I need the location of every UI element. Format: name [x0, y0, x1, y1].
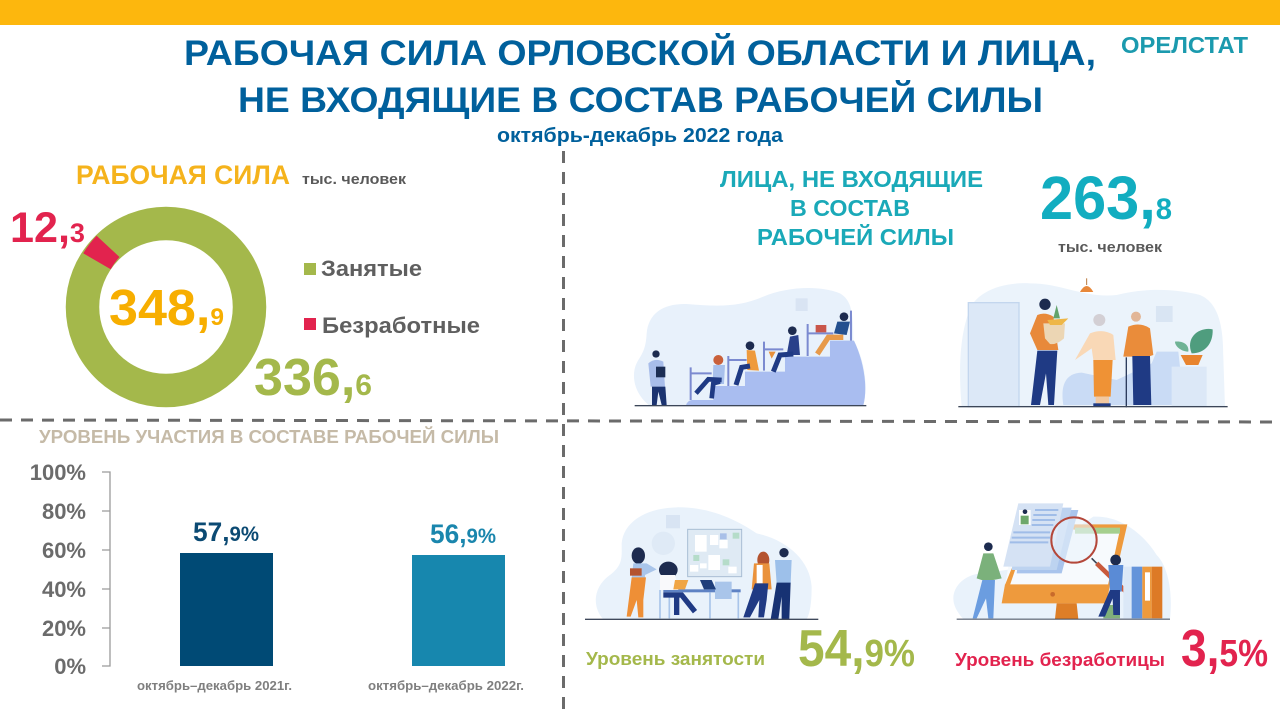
y axis: 60% [42, 538, 86, 563]
panel: employment rate [585, 507, 915, 678]
label: employment rate: Уровень занятости [586, 649, 765, 669]
panel: outside the labour force [634, 164, 1228, 407]
label: unemployment rate: Уровень безработицы [955, 650, 1165, 670]
title [184, 33, 1096, 120]
heading: labour force: РАБОЧАЯ СИЛА [76, 160, 290, 190]
illustration: students on stairs [634, 288, 866, 406]
unit label: тыс. человек [302, 171, 407, 188]
y axis: 80% [42, 499, 86, 524]
value: unemployed: 12,3 [10, 204, 85, 252]
value: employment rate: 54,9% [798, 620, 915, 678]
bar: 2022: 56,9% [430, 519, 496, 549]
organisation name: ОРЕЛСТАТ [1121, 32, 1248, 58]
legend: unemployed: Безработные [322, 313, 480, 338]
panel: labour force [10, 160, 480, 407]
value: employed: 336,6 [254, 349, 372, 407]
y axis: 20% [42, 616, 86, 641]
subtitle: октябрь-декабрь 2022 года [497, 125, 784, 147]
title: РАБОЧАЯ СИЛА ОРЛОВСКОЙ ОБЛАСТИ И ЛИЦА, [184, 33, 1096, 73]
y axis: 0% [54, 654, 86, 679]
y axis [30, 460, 110, 679]
bar: 2022 [368, 519, 524, 693]
bar: 2021: 57,9% [193, 517, 259, 547]
bar: 2021: октябрь–декабрь 2021г. [137, 679, 292, 693]
top banner [0, 0, 1280, 25]
donut chart [82, 224, 250, 390]
bar: 2022: октябрь–декабрь 2022г. [368, 679, 524, 693]
unit label: тыс. человек [1058, 239, 1163, 256]
illustration: job search [953, 503, 1171, 620]
heading: outside the labour force: ЛИЦА, НЕ ВХОДЯЩИЕ [720, 166, 983, 192]
chart heading: УРОВЕНЬ УЧАСТИЯ В СОСТАВЕ РАБОЧЕЙ СИЛЫ [39, 426, 499, 447]
value: unemployment rate: 3,5% [1181, 620, 1268, 678]
heading: outside the labour force: В СОСТАВ [790, 195, 910, 221]
heading: outside the labour force [720, 166, 983, 250]
value: total: 348,9 [109, 279, 224, 336]
y axis: 40% [42, 577, 86, 602]
panel: unemployment rate [953, 503, 1268, 678]
illustration: visitor with elderly couple [958, 278, 1228, 407]
illustration: office team [585, 507, 818, 620]
y axis: 100% [30, 460, 86, 485]
title: НЕ ВХОДЯЩИЕ В СОСТАВ РАБОЧЕЙ СИЛЫ [238, 80, 1043, 120]
panel: participation rate chart [30, 426, 524, 693]
legend: employed: Занятые [321, 256, 422, 281]
heading: outside the labour force: РАБОЧЕЙ СИЛЫ [757, 223, 954, 250]
value: outside the labour force: 263,8 [1040, 164, 1172, 232]
bar: 2021 [137, 517, 292, 693]
